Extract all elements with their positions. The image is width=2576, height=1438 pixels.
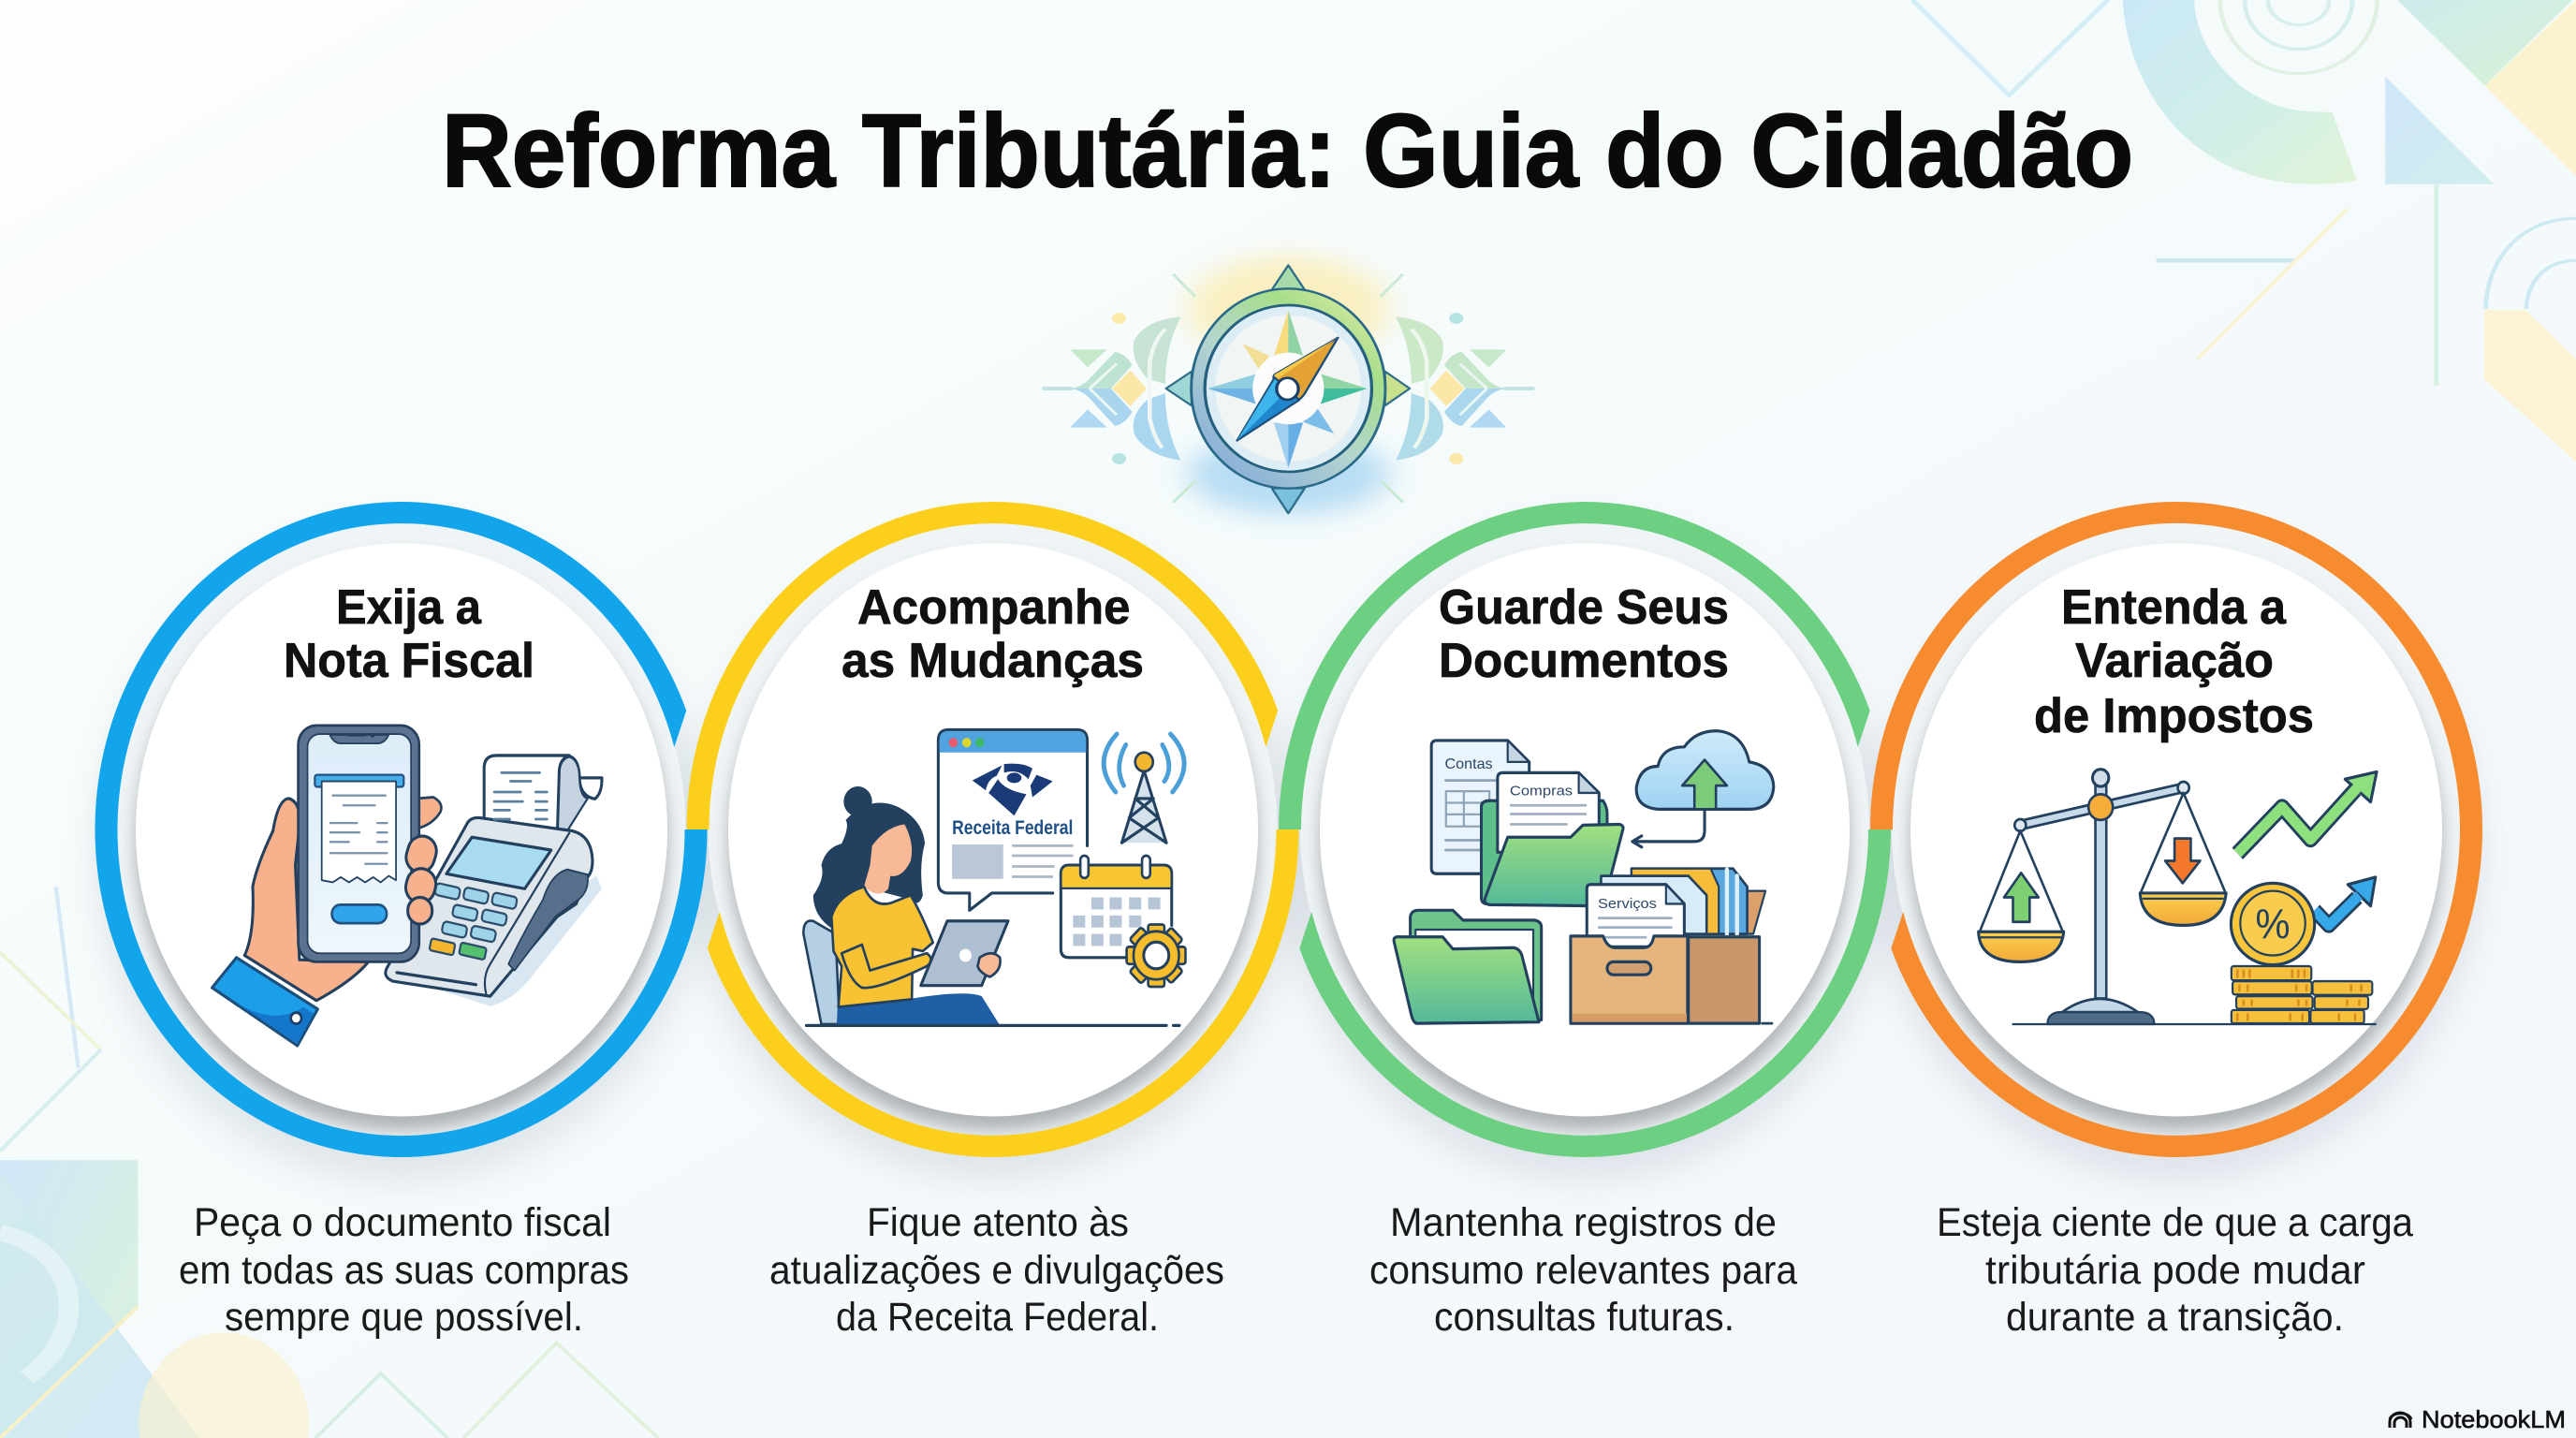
description: Exija a Nota Fiscal: em todas as suas compras [179,1248,629,1293]
description: Exija a Nota Fiscal: sempre que possível. [225,1295,583,1340]
description: Exija a Nota Fiscal: Peça o documento fiscal [194,1200,611,1245]
coin stacks [2232,966,2372,1023]
tower [1121,770,1166,843]
icon: balance scale, arrows and coins [1979,770,2377,1024]
woman [803,921,840,1024]
percent coin [2231,883,2315,965]
description: Acompanhe as Mudanças: da Receita Federal. [836,1295,1159,1340]
ring: orange [1870,502,2482,1157]
description: Exija a Nota Fiscal [179,1200,629,1340]
icon: folders, documents, cloud and archive box: Compras [1510,784,1573,800]
left pan [1980,830,2063,932]
icon: central compass emblem [1042,256,1535,515]
card machine [385,756,602,1006]
heading: Entenda a Variação de Impostos: de Impostos [2034,689,2314,743]
icon: woman with tablet, Receita Federal window, tower and calendar [803,729,1185,1025]
ring: yellow [687,502,1299,1157]
heading: Acompanhe as Mudanças: as Mudanças [842,634,1144,688]
heading: Entenda a Variação de Impostos: Entenda a [2061,580,2287,635]
heading: Exija a Nota Fiscal: Exija a [336,580,482,635]
description: Entenda a Variação de Impostos: tributária pode mudar [1985,1248,2365,1293]
heading: Exija a Nota Fiscal: Nota Fiscal [284,634,534,688]
ring: green [1279,502,1891,1157]
description: Acompanhe as Mudanças: atualizações e divulgações [769,1248,1224,1293]
fingers [402,832,440,924]
archive box with files [1748,891,1765,934]
decoration: top right geometric shapes [1912,0,2576,462]
heading: Entenda a Variação de Impostos [2034,580,2314,743]
heading: Guarde Seus Documentos: Documentos [1439,634,1729,688]
heading: Acompanhe as Mudanças: Acompanhe [857,580,1131,635]
green folder with Compras [1482,800,1607,903]
icon: folders, documents, cloud and archive box: Contas [1444,756,1493,772]
hand [244,799,369,1001]
cuff [212,958,317,1046]
description: Guarde Seus Documentos: Mantenha registros de [1390,1200,1777,1245]
icon: hand with phone and card machine [212,726,602,1046]
scale stand [2062,999,2138,1012]
cloud upload [1632,809,1705,847]
watermark: NotebookLM: NotebookLM [2422,1405,2566,1433]
description: Guarde Seus Documentos: consumo relevantes para [1369,1248,1797,1293]
description: Guarde Seus Documentos [1369,1200,1797,1340]
heading: Guarde Seus Documentos [1439,580,1729,688]
blue rising arrow [2315,898,2357,925]
Contas document [1431,741,1530,873]
gear [1127,924,1185,987]
open folder [1411,910,1542,1020]
description: Entenda a Variação de Impostos [1937,1200,2413,1340]
description: Acompanhe as Mudanças [769,1200,1224,1340]
icon: folders, documents, cloud and archive box: Serviços [1598,897,1657,912]
heading: Entenda a Variação de Impostos: Variação [2075,634,2274,688]
phone [299,726,419,961]
calendar [1061,865,1172,958]
browser speech bubble [938,729,1088,910]
heading: Guarde Seus Documentos: Guarde Seus [1439,580,1729,635]
heading: Acompanhe as Mudanças [842,580,1144,688]
description: Acompanhe as Mudanças: Fique atento às [867,1200,1129,1245]
title: Reforma Tributária: Guia do Cidadão [442,94,2133,209]
icon: folders, documents, cloud and archive box [1394,731,1774,1023]
icon: woman with tablet, Receita Federal window, tower and calendar: Receita Federal [952,817,1073,839]
right pan [2141,793,2225,892]
circle shadows and white discs [95,522,2482,1181]
description: Entenda a Variação de Impostos: durante a transição. [2006,1295,2344,1340]
icon: balance scale, arrows and coins: % [2256,902,2291,947]
ring: blue [95,502,707,1157]
decoration: bottom left geometric shapes [0,887,658,1438]
description: Guarde Seus Documentos: consultas futuras. [1434,1295,1734,1340]
description: Entenda a Variação de Impostos: Esteja ciente de que a carga [1937,1200,2413,1245]
heading: Exija a Nota Fiscal [284,580,534,688]
green rising arrow [2237,790,2355,854]
